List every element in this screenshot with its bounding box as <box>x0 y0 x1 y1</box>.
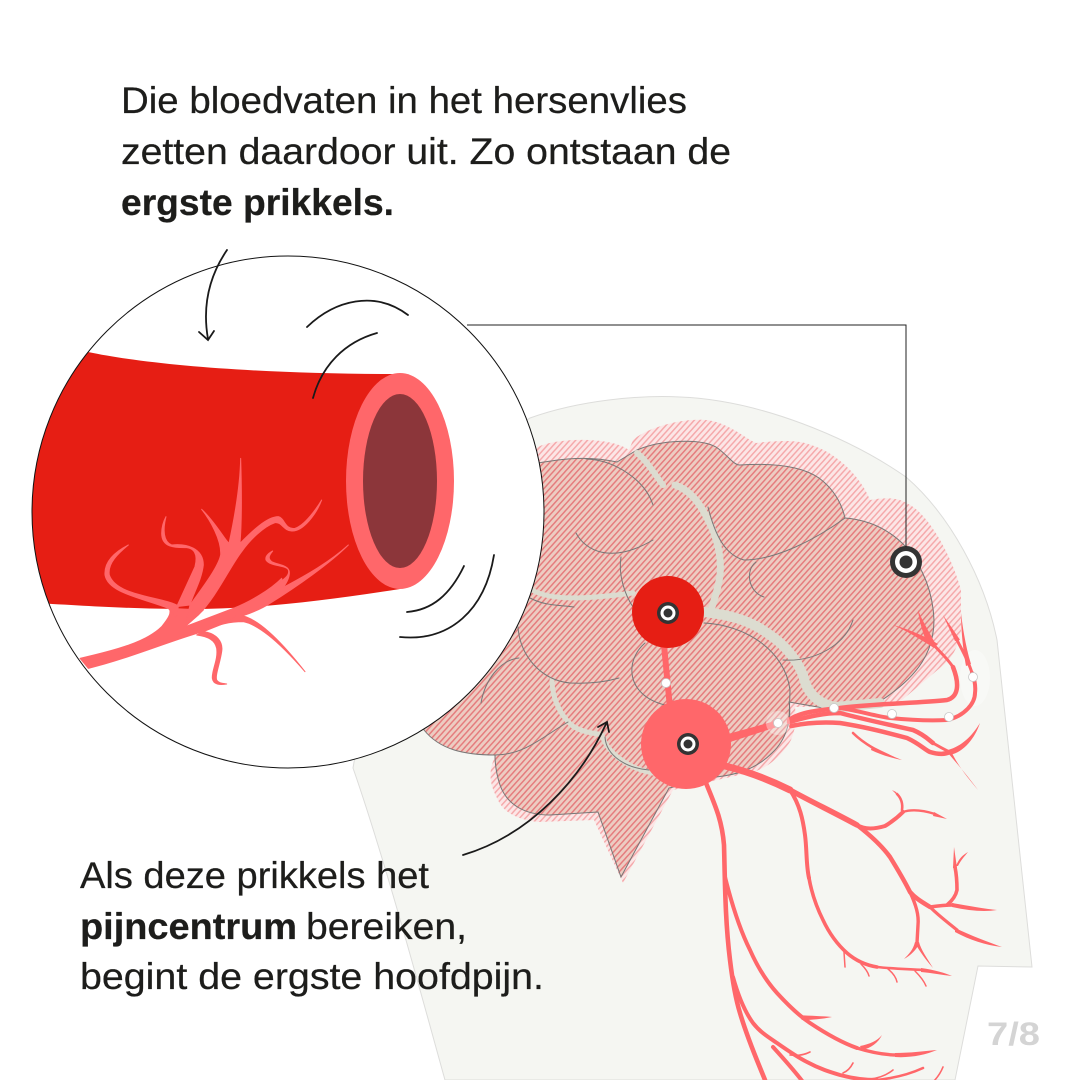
glow behind right vessels <box>960 650 990 706</box>
page number: 7/8 <box>987 1016 1040 1052</box>
node marker on pink node <box>677 733 699 755</box>
heading text: Die bloedvaten in het hersenvlies <box>121 80 687 121</box>
lower text: bereiken, <box>306 906 467 947</box>
vessel E and twigs <box>733 977 943 1080</box>
zoom circle <box>20 256 544 768</box>
brain channels <box>532 453 880 773</box>
vessel D and twigs <box>725 877 937 1057</box>
brain outer halo <box>400 420 961 883</box>
heading text: zetten daardoor uit. Zo ontstaan de <box>121 131 731 172</box>
arrow: to pain centre <box>463 722 609 855</box>
vessel C main trunk <box>706 783 765 1080</box>
brain <box>400 420 961 883</box>
heading text <box>121 80 731 223</box>
tube lumen <box>363 394 437 568</box>
brain fold lines <box>481 459 853 770</box>
tube opening rim <box>346 373 454 589</box>
vessels: lower branches <box>706 766 1002 1080</box>
lower text: Als deze prikkels het <box>80 855 430 896</box>
circle outline <box>32 256 544 768</box>
blood vessel tube <box>20 345 454 684</box>
pink node: pain centre <box>641 699 731 789</box>
heading text: ergste prikkels. <box>121 182 394 223</box>
lower text: begint de ergste hoofdpijn. <box>80 956 544 997</box>
node connectors <box>664 645 777 742</box>
branching capillaries <box>80 458 348 684</box>
connector line from zoom circle to node <box>467 325 906 547</box>
small white nodes <box>662 672 978 735</box>
vessel B and twigs <box>790 790 952 986</box>
head silhouette <box>353 397 1032 1080</box>
motion lines <box>307 301 494 638</box>
brain body <box>400 441 934 877</box>
vessels: right group <box>789 610 980 790</box>
large node marker on head <box>890 546 922 578</box>
arrow: to vessel <box>199 250 227 340</box>
lower text <box>80 855 544 997</box>
lower text: pijncentrum <box>80 906 297 947</box>
vessel A and branches <box>725 766 1002 968</box>
node marker on red node <box>657 602 679 624</box>
circle background <box>32 256 544 768</box>
red node: top <box>632 576 704 648</box>
